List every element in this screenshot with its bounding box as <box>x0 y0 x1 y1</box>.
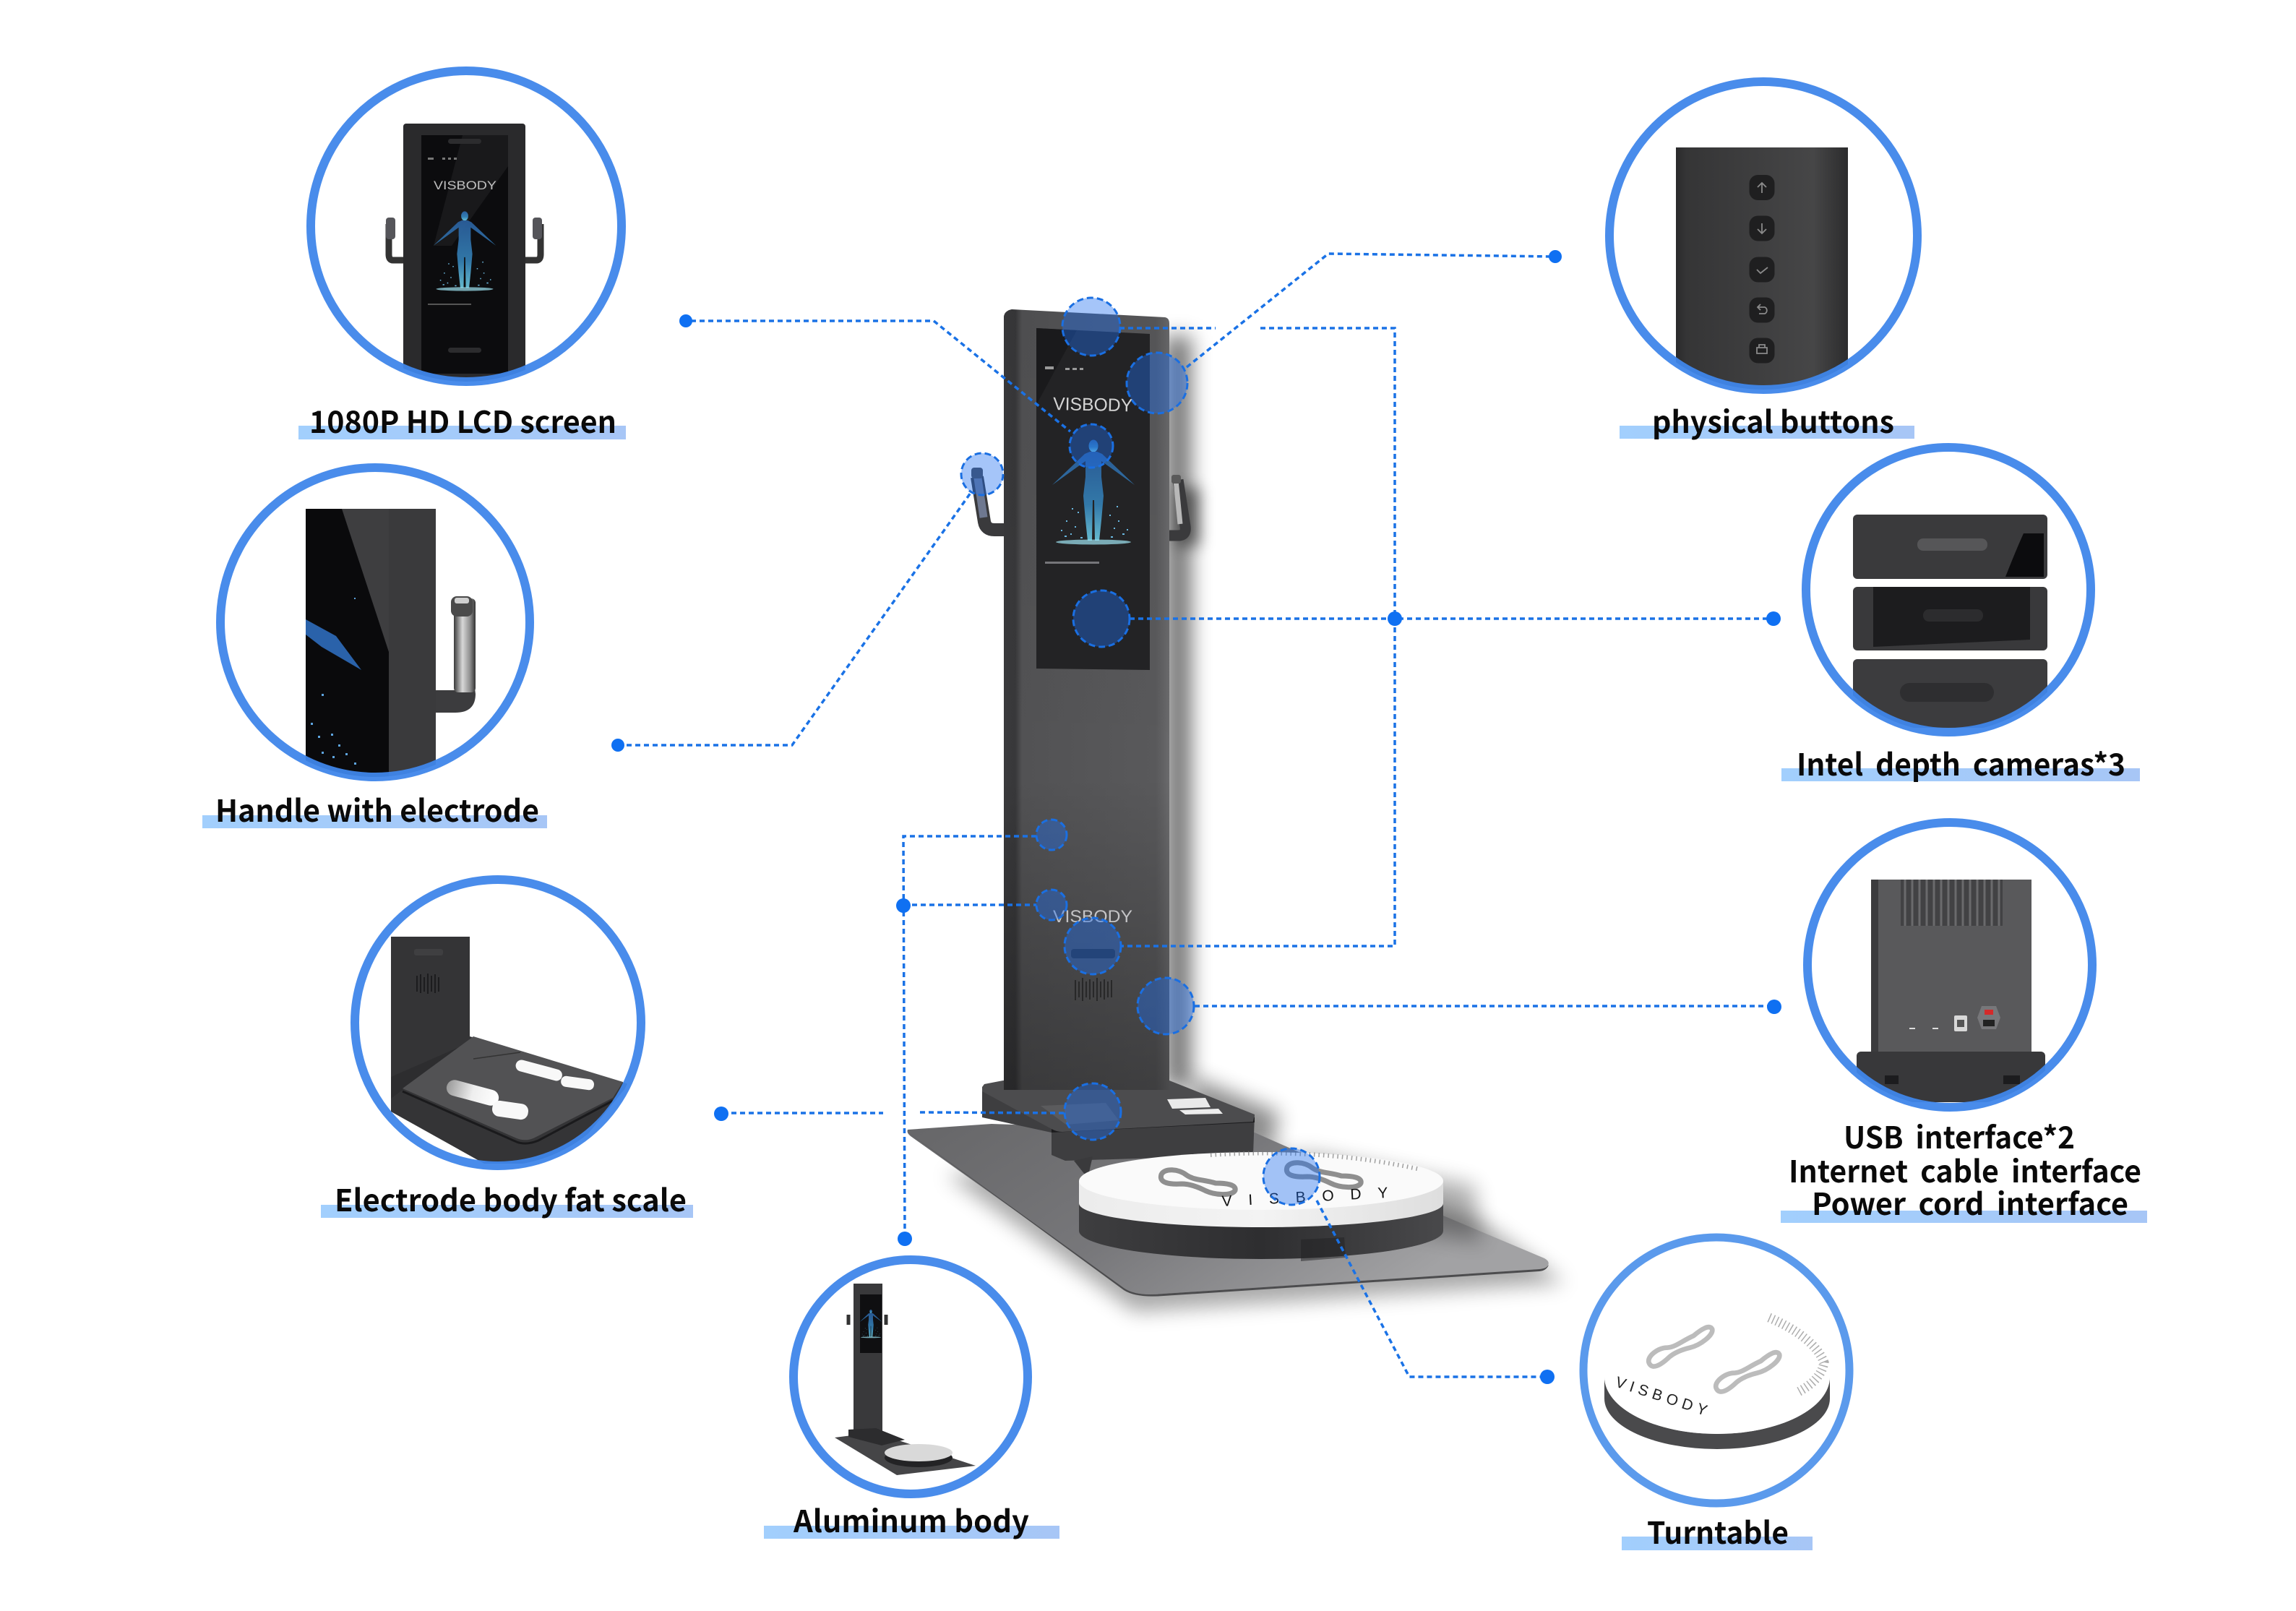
hotspot: scale <box>1065 1083 1121 1140</box>
turntable <box>1079 1152 1443 1261</box>
label text: Intel depth cameras*3 <box>1797 741 2125 785</box>
electrode pads <box>447 1080 499 1106</box>
panel: Handle with electrode <box>202 468 547 831</box>
panel: Aluminum body <box>764 1260 1059 1542</box>
turntable logo: VISBODY <box>1613 1374 1709 1419</box>
panel: USB / Internet / Power interfaces <box>1781 822 2147 1224</box>
dot: ports <box>1767 1000 1781 1014</box>
hotspot: handle <box>961 453 1003 495</box>
photo: tablet front view <box>386 124 542 384</box>
turntable logo: VISBODY <box>1221 1185 1388 1210</box>
left handle <box>971 468 1010 530</box>
dot: handle <box>611 739 624 752</box>
label text: Turntable <box>1647 1509 1789 1553</box>
connector dots <box>611 250 1781 1384</box>
panel: physical buttons <box>1609 82 1917 442</box>
ring <box>1609 82 1917 390</box>
label text <box>1789 1114 2141 1224</box>
label bar <box>1781 768 2140 781</box>
panel: Intel depth cameras*3 <box>1781 447 2140 785</box>
turntable shadow on platform <box>1294 1149 1482 1243</box>
platform shadow <box>947 1149 1565 1312</box>
hotspots on product <box>961 298 1320 1205</box>
label bar <box>1622 1537 1813 1550</box>
panel: Turntable <box>1583 1237 1849 1553</box>
dot: cameras <box>1766 611 1781 626</box>
printer slot <box>1071 949 1115 958</box>
button glyphs <box>1757 183 1768 353</box>
speaker grille <box>1075 978 1112 1001</box>
label text: Aluminum body <box>793 1498 1029 1542</box>
leader: handle <box>618 493 971 745</box>
dot: aluminum junction <box>896 898 911 913</box>
label bar <box>321 1205 693 1218</box>
photo: rear ports <box>1857 880 2045 1102</box>
power socket <box>1977 1006 2000 1029</box>
dot: buttons <box>1549 250 1562 263</box>
screen status marks <box>1045 366 1083 370</box>
ring <box>1807 822 2092 1107</box>
hotspot: top camera <box>1062 298 1120 356</box>
scale base <box>982 1081 1255 1178</box>
leader: middle camera <box>1130 617 1773 620</box>
hotspot: body lower <box>1036 890 1067 920</box>
ring <box>794 1260 1028 1494</box>
label bar <box>1620 426 1914 439</box>
USB port <box>1954 1015 1967 1031</box>
dot: aluminum <box>898 1232 912 1246</box>
hotspot: buttons <box>1127 353 1187 413</box>
left footprint <box>1646 1324 1715 1369</box>
hotspot: screen <box>1070 424 1113 468</box>
ring <box>1806 447 2091 732</box>
hotspot: body upper <box>1036 820 1067 850</box>
dot: cameras junction <box>1388 611 1402 626</box>
photo: turntable <box>1604 1314 1830 1449</box>
label bar <box>764 1526 1059 1539</box>
right footprint <box>1286 1163 1361 1187</box>
leader: turntable <box>1317 1200 1547 1377</box>
label text: Power cord interface <box>1812 1180 2128 1224</box>
ring <box>1583 1237 1849 1503</box>
base shadow <box>1192 1077 1279 1149</box>
photo: three camera modules <box>1853 515 2047 728</box>
leader: aluminum body <box>903 836 1036 1239</box>
dot: screen <box>679 314 692 327</box>
photo: button column <box>1676 147 1848 393</box>
ring <box>311 71 622 382</box>
label text: physical buttons <box>1652 398 1894 442</box>
label bar <box>298 426 626 439</box>
tablet logo: VISBODY <box>434 179 496 192</box>
ring <box>220 468 530 777</box>
turntable scale ticks <box>1211 1154 1420 1169</box>
leader: top camera <box>1119 327 1216 330</box>
panel: 1080P HD LCD screen <box>298 71 626 442</box>
dot: scale <box>714 1107 728 1121</box>
photo: full product mini <box>835 1284 976 1475</box>
panel: Electrode body fat scale <box>321 880 693 1221</box>
label bar <box>202 815 547 828</box>
tower <box>1004 309 1169 1090</box>
hotspot: turntable <box>1263 1148 1320 1205</box>
tower shadow <box>1165 336 1191 1088</box>
label bar <box>1781 1211 2147 1223</box>
leader lines <box>618 254 1774 1377</box>
leader: scale right part <box>920 1112 1065 1113</box>
hotspot: lower camera <box>1065 918 1121 974</box>
floor platform <box>908 1124 1549 1294</box>
tower logo: VISBODY <box>1053 907 1132 927</box>
hotspot: middle camera <box>1073 590 1130 647</box>
leader: aluminum branch <box>903 903 1036 906</box>
right handle <box>1169 475 1185 536</box>
label text: 1080P HD LCD screen <box>309 398 616 442</box>
ring <box>355 880 641 1166</box>
right footprint <box>1713 1350 1782 1394</box>
leader: scale <box>723 1112 883 1114</box>
label text: Internet cable interface <box>1789 1148 2141 1192</box>
leader: cameras bracket <box>1121 328 1395 946</box>
leader: physical buttons <box>1187 254 1554 367</box>
screen body figure <box>1052 439 1135 545</box>
label text: USB interface*2 <box>1844 1114 2075 1158</box>
main product: body scanner <box>908 309 1565 1312</box>
photo: scale close-up <box>391 937 629 1164</box>
left footprint <box>1161 1170 1235 1195</box>
display screen <box>1036 328 1150 670</box>
label text: Handle with electrode <box>215 787 539 831</box>
photo: handle close-up <box>306 509 476 783</box>
screen logo: VISBODY <box>1053 394 1133 416</box>
leader: screen <box>682 321 1070 431</box>
dot: turntable <box>1540 1370 1555 1384</box>
leader: ports <box>1195 1005 1774 1008</box>
screen caption marks <box>1045 562 1099 564</box>
hotspot: ports <box>1138 978 1194 1034</box>
label text: Electrode body fat scale <box>335 1177 687 1221</box>
handle shadow <box>1177 488 1200 546</box>
